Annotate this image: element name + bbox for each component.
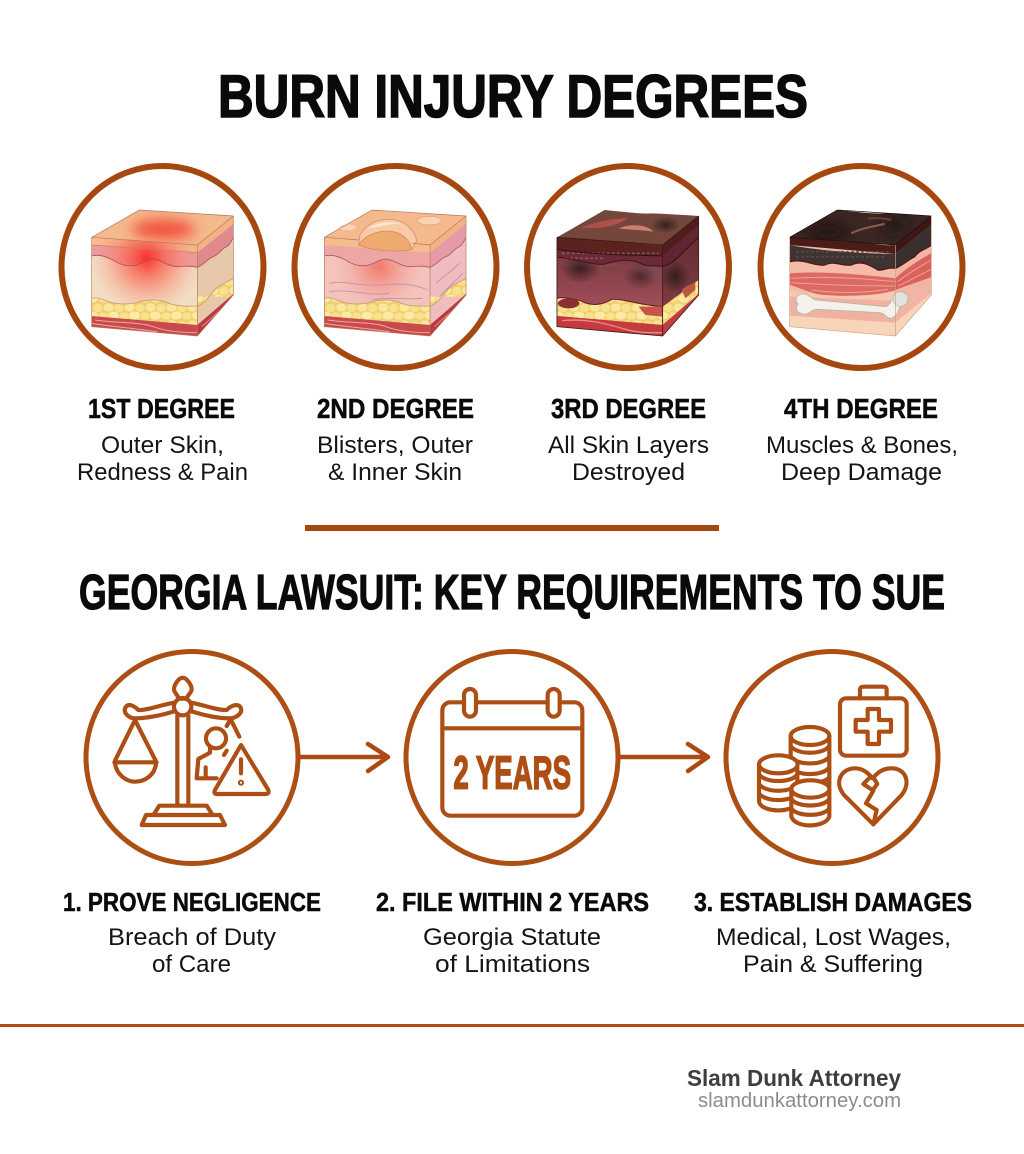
label: step 1 xyxy=(63,887,321,978)
panel: step 3 establish damages xyxy=(726,652,938,864)
label: 4th degree: 4TH DEGREE xyxy=(784,393,938,424)
icon: coins, medical kit, broken heart xyxy=(759,687,907,825)
label: 4th degree: Muscles & Bones, xyxy=(766,432,958,459)
label: 4th degree xyxy=(766,393,958,486)
icon: calendar 2 years: 2 YEARS xyxy=(453,746,571,798)
label: step 3 xyxy=(694,887,972,978)
footer: attorney branding xyxy=(687,1065,901,1112)
label: 2nd degree: Blisters, Outer xyxy=(317,432,473,459)
label: 2nd degree xyxy=(317,393,474,486)
label: 3rd degree: Destroyed xyxy=(572,459,685,486)
label: 3rd degree: 3RD DEGREE xyxy=(551,393,706,424)
label: 1st degree xyxy=(77,393,248,486)
label: step 2 xyxy=(376,887,649,978)
label: step 1: Breach of Duty xyxy=(108,924,276,951)
icon: scales, person and warning xyxy=(114,678,269,825)
circle frame: step 3 xyxy=(726,652,938,864)
illustration: 4th degree cube with muscle and bone xyxy=(790,210,932,337)
circle frame: 2nd degree xyxy=(294,166,496,368)
label: 3rd degree xyxy=(548,393,709,486)
footer: attorney branding: Slam Dunk Attorney xyxy=(687,1065,901,1091)
panel: step 2 file within 2 years xyxy=(406,652,618,864)
circle frame: 1st degree xyxy=(62,166,264,368)
label: step 3: Medical, Lost Wages, xyxy=(716,924,951,951)
illustration: 3rd degree charred skin cube xyxy=(557,210,699,337)
label: step 2: of Limitations xyxy=(435,951,590,978)
panel: 3rd degree burn xyxy=(527,166,729,368)
title: BURN INJURY DEGREES xyxy=(218,63,808,130)
arrow: step 1 to step 2 xyxy=(301,744,388,771)
label: 1st degree: Outer Skin, xyxy=(101,432,224,459)
icon: calendar 2 years xyxy=(442,689,582,816)
arrow: step 2 to step 3 xyxy=(621,744,708,771)
circle frame: 3rd degree xyxy=(527,166,729,368)
label: step 3: 3. ESTABLISH DAMAGES xyxy=(694,887,972,917)
label: 2nd degree: 2ND DEGREE xyxy=(317,393,474,424)
label: step 1: of Care xyxy=(152,951,231,978)
circle frame: step 2 xyxy=(406,652,618,864)
footer: attorney branding: slamdunkattorney.com xyxy=(698,1090,901,1112)
panel: 1st degree burn xyxy=(62,166,264,368)
label: step 1: 1. PROVE NEGLIGENCE xyxy=(63,887,321,917)
illustration: 2nd degree skin cube with blisters xyxy=(324,210,467,337)
label: 3rd degree: All Skin Layers xyxy=(548,432,709,459)
circle frame: step 1 xyxy=(86,652,298,864)
label: step 3: Pain & Suffering xyxy=(743,951,923,978)
label: 1st degree: Redness & Pain xyxy=(77,459,248,486)
blisters xyxy=(339,216,441,251)
illustration: 1st degree skin cube xyxy=(92,210,234,337)
label: 1st degree: 1ST DEGREE xyxy=(88,393,235,424)
label: step 2: 2. FILE WITHIN 2 YEARS xyxy=(376,887,649,917)
panel: 2nd degree burn xyxy=(294,166,496,368)
bone xyxy=(796,292,909,318)
label: 4th degree: Deep Damage xyxy=(781,459,942,486)
circle frame: 4th degree xyxy=(760,166,962,368)
label: 2nd degree: & Inner Skin xyxy=(328,459,462,486)
label: step 2: Georgia Statute xyxy=(423,924,601,951)
panel: step 1 prove negligence xyxy=(86,652,298,864)
panel: 4th degree burn xyxy=(760,166,962,368)
